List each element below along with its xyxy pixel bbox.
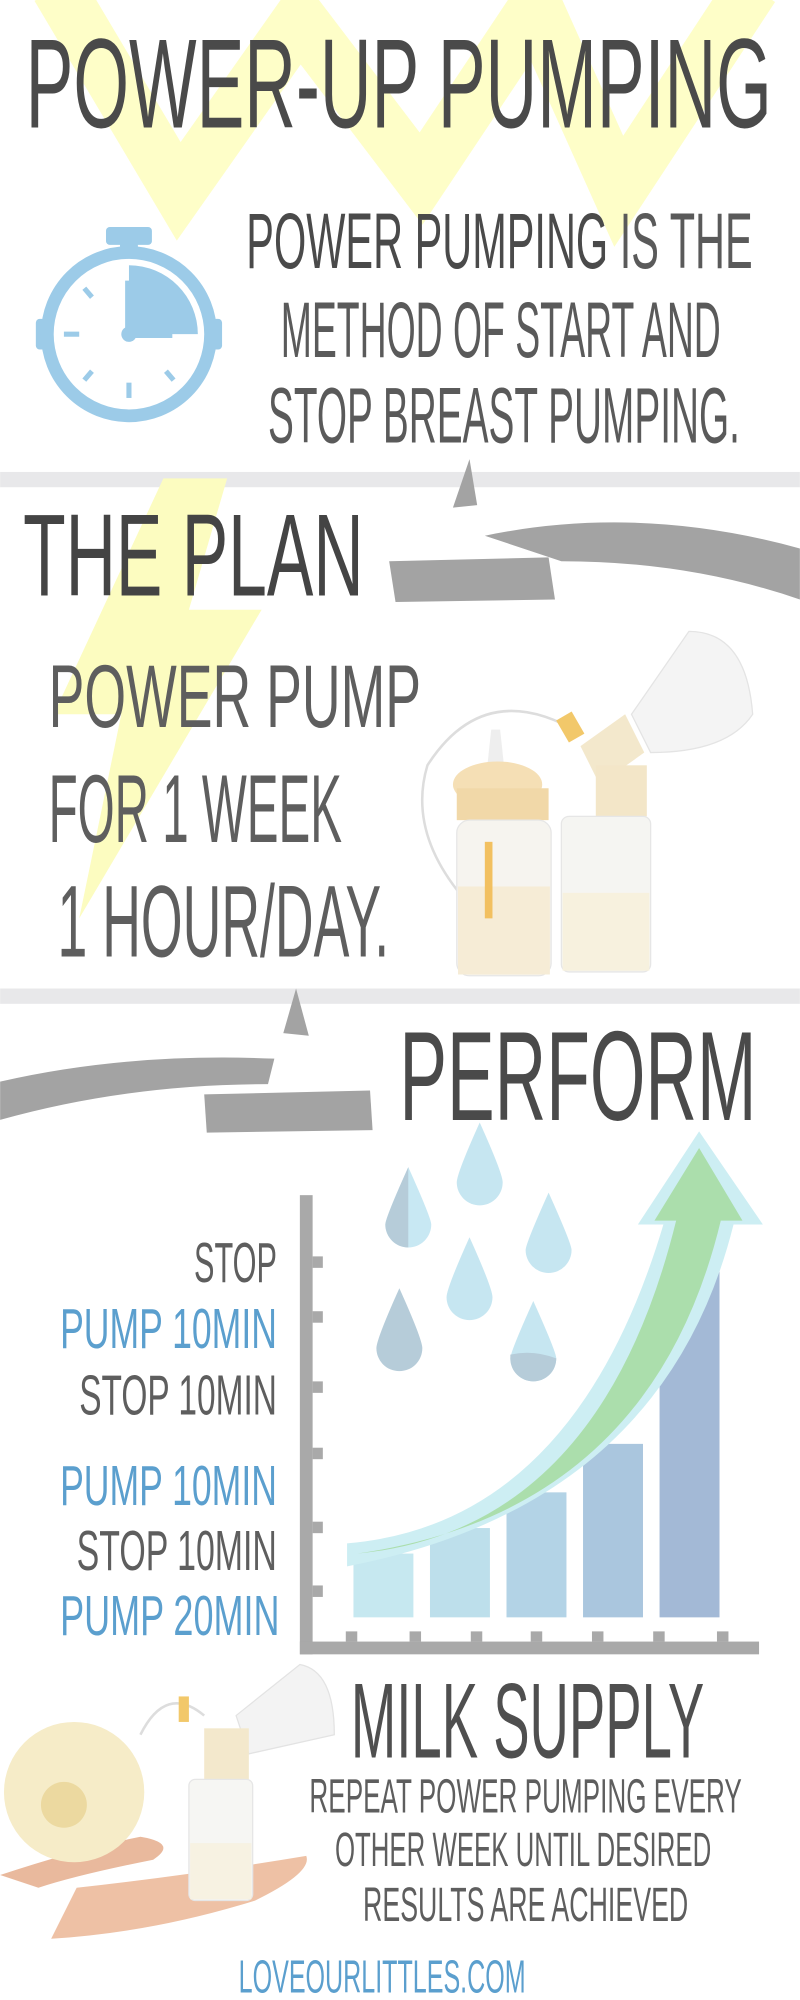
photo: pump in hands (0, 1665, 334, 1939)
plan text: POWER PUMP (49, 646, 421, 746)
schedule labels: PUMP 10MIN (60, 1297, 277, 1360)
plan text: 1 HOUR/DAY. (58, 865, 389, 979)
schedule labels (60, 1231, 279, 1647)
schedule labels: STOP (194, 1231, 277, 1294)
arrow: top grey cycle arrow (389, 459, 800, 602)
repeat text (309, 1770, 742, 1932)
plan text (49, 646, 421, 979)
icon: green growth arrow (347, 1131, 763, 1566)
icon: milk drops (376, 1122, 572, 1381)
plan text: FOR 1 WEEK (49, 754, 342, 863)
schedule labels: PUMP 10MIN (60, 1454, 277, 1517)
background zigzag (58, 0, 753, 191)
photo: bottles and pump (422, 631, 753, 976)
schedule labels: PUMP 20MIN (60, 1584, 279, 1647)
heading: the plan: THE PLAN (23, 490, 364, 621)
icon: stopwatch (36, 227, 222, 416)
schedule labels: STOP 10MIN (77, 1519, 277, 1582)
bar chart (300, 1195, 759, 1654)
background lightning bolt (54, 478, 262, 918)
schedule labels: STOP 10MIN (79, 1364, 277, 1427)
intro text (246, 196, 753, 460)
arrow: bottom grey cycle arrow (0, 989, 373, 1133)
